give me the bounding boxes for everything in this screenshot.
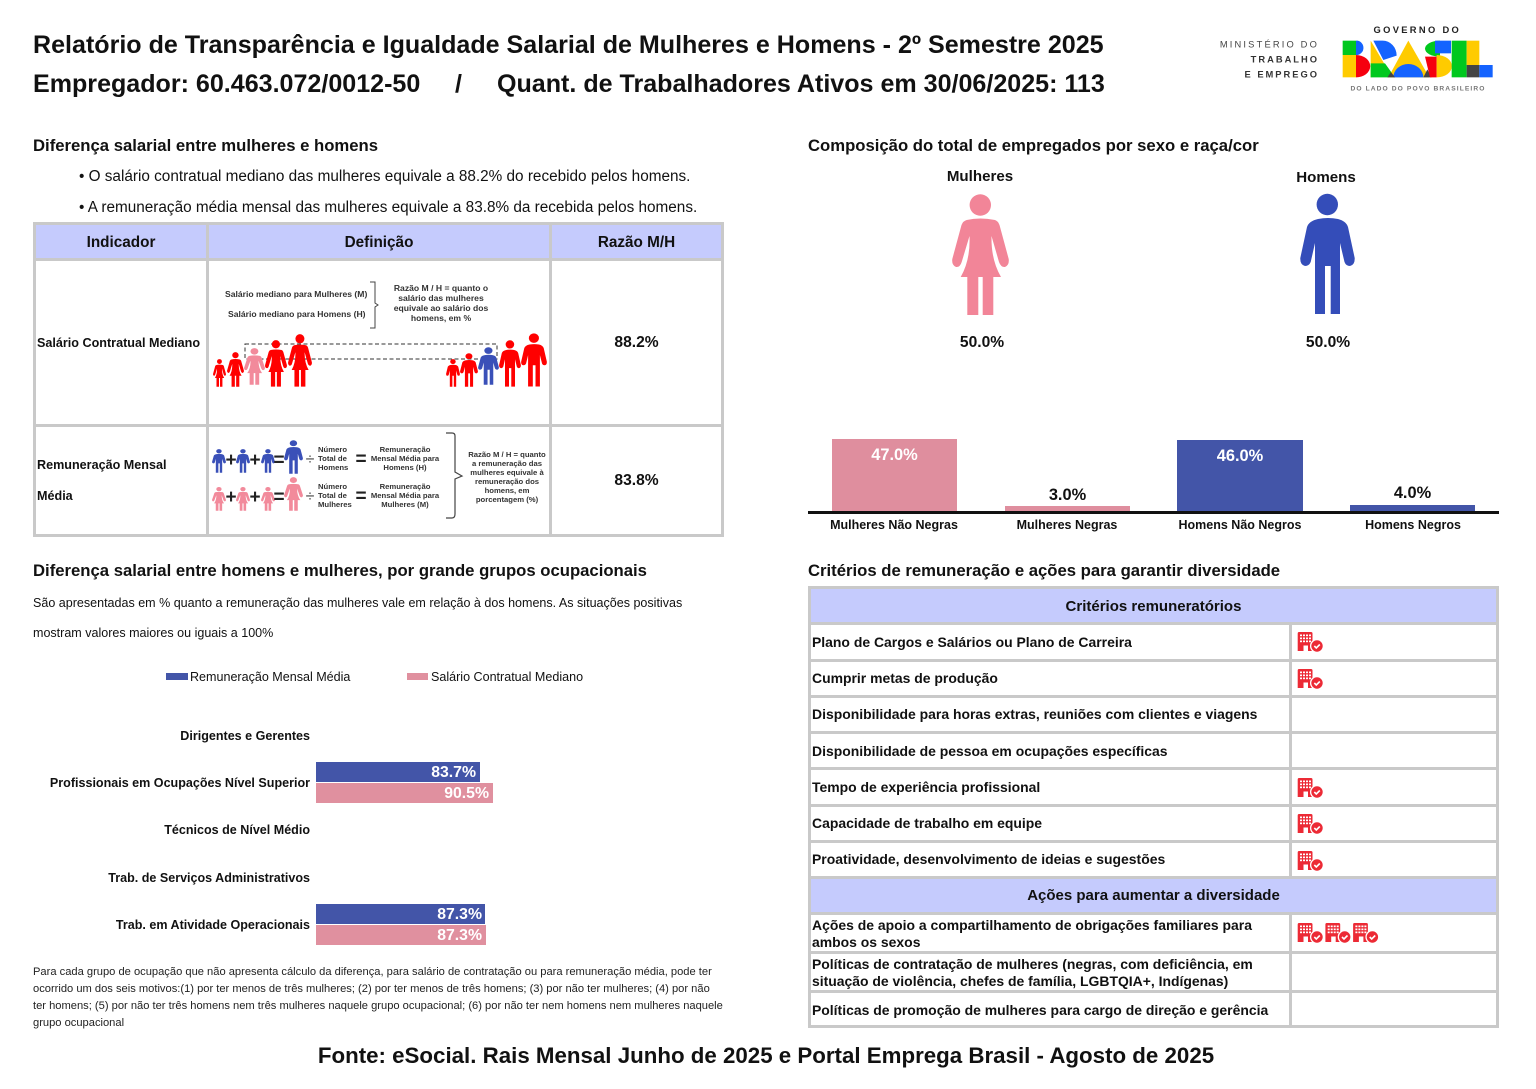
diagram: remuneração média: Número	[318, 482, 347, 491]
diagram: salário mediano: Salário mediano para Mulheres (M)	[225, 289, 367, 299]
diagram: salário mediano: homens, em %	[411, 313, 471, 323]
bullet: remuneração média: • A remuneração média mensal das mulheres equivale a 83.8% da recebida pelos homens.	[79, 199, 697, 216]
criteria rows: situação de violência, chefes de família, LGBTQIA+, Indígenas)	[812, 973, 1228, 989]
diagram: remuneração média: =	[355, 449, 367, 470]
diagram: salário mediano	[213, 282, 547, 387]
diagram: remuneração média: a remuneração das	[472, 459, 542, 468]
bar chart: composição por raça/cor: 3.0%	[1049, 486, 1086, 504]
diagram: remuneração média: =	[273, 487, 285, 508]
criteria rows: ambos os sexos	[812, 934, 920, 950]
criteria rows	[812, 634, 1268, 1018]
value: mulheres 50%: 50.0%	[960, 334, 1004, 351]
legend: Remuneração Mensal Média	[190, 670, 350, 684]
table: indicadores	[33, 222, 724, 537]
bar chart: grupos ocupacionais: 87.3%	[437, 906, 482, 923]
diagram: remuneração média: ÷	[306, 488, 315, 505]
value: homens 50%: 50.0%	[1306, 334, 1350, 351]
bar chart: grupos ocupacionais: Trab. em Atividade Operacionais	[116, 918, 310, 932]
diagram: remuneração média: ÷	[306, 451, 315, 468]
table: indicadores: Indicador	[87, 234, 155, 251]
text: explicação	[33, 596, 682, 640]
criteria rows: Disponibilidade de pessoa em ocupações específicas	[812, 743, 1168, 759]
table: indicadores: 83.8%	[614, 472, 659, 489]
source: Fonte: eSocial. Rais Mensal Junho de 2025 e Portal Emprega Brasil - Agosto de 2025	[318, 1043, 1214, 1068]
footnote	[33, 966, 723, 1029]
diagram: remuneração média: Homens (H)	[383, 463, 427, 472]
icon: experiência	[1298, 778, 1323, 798]
icons: apoio familiar	[1298, 923, 1378, 943]
criteria rows: Políticas de contratação de mulheres (negras, com deficiência, em	[812, 956, 1253, 972]
bar chart: grupos ocupacionais: 83.7%	[431, 764, 476, 781]
bar chart: composição por raça/cor	[808, 439, 1499, 532]
title: Relatório de Transparência e Igualdade Salarial de Mulheres e Homens - 2º Semestre 2025	[33, 30, 1104, 58]
icon: proatividade	[1298, 851, 1323, 871]
footnote: Para cada grupo de ocupação que não apresenta cálculo da diferença, para salário de contratação ou para remuneração média, pode ter	[33, 966, 712, 978]
title: Quant. de Trabalhadores Ativos em 30/06/2025: 113	[497, 70, 1105, 98]
diagram: remuneração média: Mulheres (M)	[381, 500, 429, 509]
diagram: salário mediano: Razão M / H = quanto o	[394, 283, 488, 293]
table: critérios de remuneração e ações: Ações para aumentar a diversidade	[1027, 887, 1280, 904]
diagram: remuneração média: +	[225, 450, 237, 471]
diagram: salário mediano: equivale ao salário dos	[394, 303, 489, 313]
diagram: remuneração média: Mulheres	[318, 500, 352, 509]
heading: composição: Composição do total de empregados por sexo e raça/cor	[808, 136, 1259, 155]
icon: trabalho em equipe	[1298, 814, 1323, 834]
criteria rows: Políticas de promoção de mulheres para cargo de direção e gerência	[812, 1002, 1268, 1018]
bar chart: grupos ocupacionais: Trab. de Serviços Administrativos	[108, 871, 310, 885]
bar chart: composição por raça/cor: 47.0%	[871, 446, 918, 464]
icon: metas de produção	[1298, 669, 1323, 689]
diagram: remuneração média	[212, 432, 546, 519]
table: critérios de remuneração e ações	[808, 586, 1499, 1028]
diagram: remuneração média: Homens	[318, 463, 348, 472]
criteria rows: Cumprir metas de produção	[812, 670, 998, 686]
table: indicadores: 88.2%	[614, 334, 659, 351]
table: indicadores: Remuneração Mensal	[37, 458, 166, 472]
bar chart: grupos ocupacionais: Profissionais em Ocupações Nível Superior	[50, 776, 310, 790]
footnote: ocorrido um dos seis motivos:(1) por ter menos de três mulheres; (2) por ter menos de três homens; (3) por não ter mulheres; (4) por não	[33, 983, 710, 995]
diagram: remuneração média: +	[249, 450, 261, 471]
bar chart: composição por raça/cor: 4.0%	[1394, 484, 1431, 502]
diagram: remuneração média: porcentagem (%)	[476, 495, 539, 504]
logo: Ministério do Trabalho e Emprego / Governo do Brasil: MINISTÉRIO DO	[1220, 40, 1319, 50]
diagram: remuneração média: Total de	[318, 454, 348, 463]
diagram: remuneração média: +	[249, 487, 261, 508]
criteria rows: Disponibilidade para horas extras, reuniões com clientes e viagens	[812, 706, 1257, 722]
legend: Salário Contratual Mediano	[431, 670, 583, 684]
logo: Ministério do Trabalho e Emprego / Governo do Brasil: DO LADO DO POVO BRASILEIRO	[1350, 85, 1486, 92]
bullet: salário contratual: • O salário contratual mediano das mulheres equivale a 88.2% do recebido pelos homens.	[79, 168, 690, 185]
diagram: remuneração média: Mensal Média para	[371, 454, 440, 463]
diagram: remuneração média: +	[225, 487, 237, 508]
diagram: remuneração média: homens, em	[485, 486, 530, 495]
bar chart: composição por raça/cor: Homens Não Negros	[1179, 518, 1301, 532]
diagram: remuneração média: Total de	[318, 491, 348, 500]
title: /	[455, 70, 462, 98]
bar chart: grupos ocupacionais: Técnicos de Nível Médio	[164, 823, 310, 837]
label: mulheres: Mulheres	[947, 168, 1013, 185]
heading: critérios: Critérios de remuneração e ações para garantir diversidade	[808, 561, 1280, 580]
diagram: remuneração média: Número	[318, 445, 347, 454]
criteria rows: Tempo de experiência profissional	[812, 779, 1040, 795]
table: indicadores: Salário Contratual Mediano	[37, 336, 200, 350]
text: explicação: mostram valores maiores ou iguais a 100%	[33, 626, 273, 640]
label: homens: Homens	[1296, 169, 1356, 186]
table: critérios de remuneração e ações: Critérios remuneratórios	[1066, 598, 1241, 614]
diagram: remuneração média: mulheres equivale à	[470, 468, 544, 477]
text: explicação: São apresentadas em % quanto a remuneração das mulheres vale em relação à dos homens. As situações positivas	[33, 596, 682, 610]
bar chart: composição por raça/cor: Mulheres Negras	[1017, 518, 1117, 532]
heading: diferença salarial: Diferença salarial entre mulheres e homens	[33, 136, 378, 155]
table: indicadores: Média	[37, 489, 73, 503]
criteria rows: Capacidade de trabalho em equipe	[812, 815, 1042, 831]
diagram: remuneração média: Mensal Média para	[371, 491, 440, 500]
logo: Ministério do Trabalho e Emprego / Governo do Brasil: TRABALHO	[1251, 55, 1319, 65]
criteria rows: Ações de apoio a compartilhamento de obrigações familiares para	[812, 917, 1252, 933]
bar chart: composição por raça/cor: Homens Negros	[1365, 518, 1461, 532]
icon: homem	[1300, 194, 1355, 314]
diagram: remuneração média: Remuneração	[380, 482, 431, 491]
bar chart: grupos ocupacionais: 87.3%	[437, 927, 482, 944]
title	[33, 30, 1105, 98]
criteria rows: Plano de Cargos e Salários ou Plano de Carreira	[812, 634, 1132, 650]
diagram: remuneração média: =	[273, 450, 285, 471]
bar chart: composição por raça/cor: 46.0%	[1217, 447, 1263, 465]
logo: Ministério do Trabalho e Emprego / Governo do Brasil: GOVERNO DO	[1374, 25, 1461, 35]
diagram: remuneração média: Razão M / H = quanto	[468, 450, 546, 459]
icon: mulher	[952, 194, 1009, 315]
footnote: ter homens; (5) por não ter três homens nem três mulheres naquele grupo ocupacional; (6) por não ter nem homens nem mulheres naquele	[33, 1000, 723, 1012]
title: Empregador: 60.463.072/0012-50	[33, 70, 420, 98]
diagram: remuneração média: remuneração dos	[475, 477, 539, 486]
logo: Ministério do Trabalho e Emprego / Governo do Brasil	[1220, 25, 1493, 92]
diagram: remuneração média: Remuneração	[380, 445, 431, 454]
logo: Ministério do Trabalho e Emprego / Governo do Brasil: E EMPREGO	[1244, 69, 1319, 79]
footnote: grupo ocupacional	[33, 1017, 124, 1029]
table: indicadores: Razão M/H	[598, 234, 675, 251]
bar chart: grupos ocupacionais	[50, 729, 493, 945]
diagram: salário mediano: salário das mulheres	[398, 293, 484, 303]
bar chart: composição por raça/cor: Mulheres Não Negras	[830, 518, 958, 532]
bar chart: grupos ocupacionais: 90.5%	[444, 785, 489, 802]
icon: plano de cargos	[1298, 632, 1323, 652]
diagram: salário mediano: Salário mediano para Homens (H)	[228, 309, 366, 319]
bar chart: grupos ocupacionais: Dirigentes e Gerentes	[180, 729, 310, 743]
heading: diferença por grupos ocupacionais: Diferença salarial entre homens e mulheres, por grande grupos ocupacionais	[33, 561, 647, 580]
legend	[166, 670, 583, 684]
table: indicadores: Definição	[345, 234, 413, 251]
criteria rows: Proatividade, desenvolvimento de ideias e sugestões	[812, 851, 1165, 867]
diagram: remuneração média: =	[355, 486, 367, 507]
